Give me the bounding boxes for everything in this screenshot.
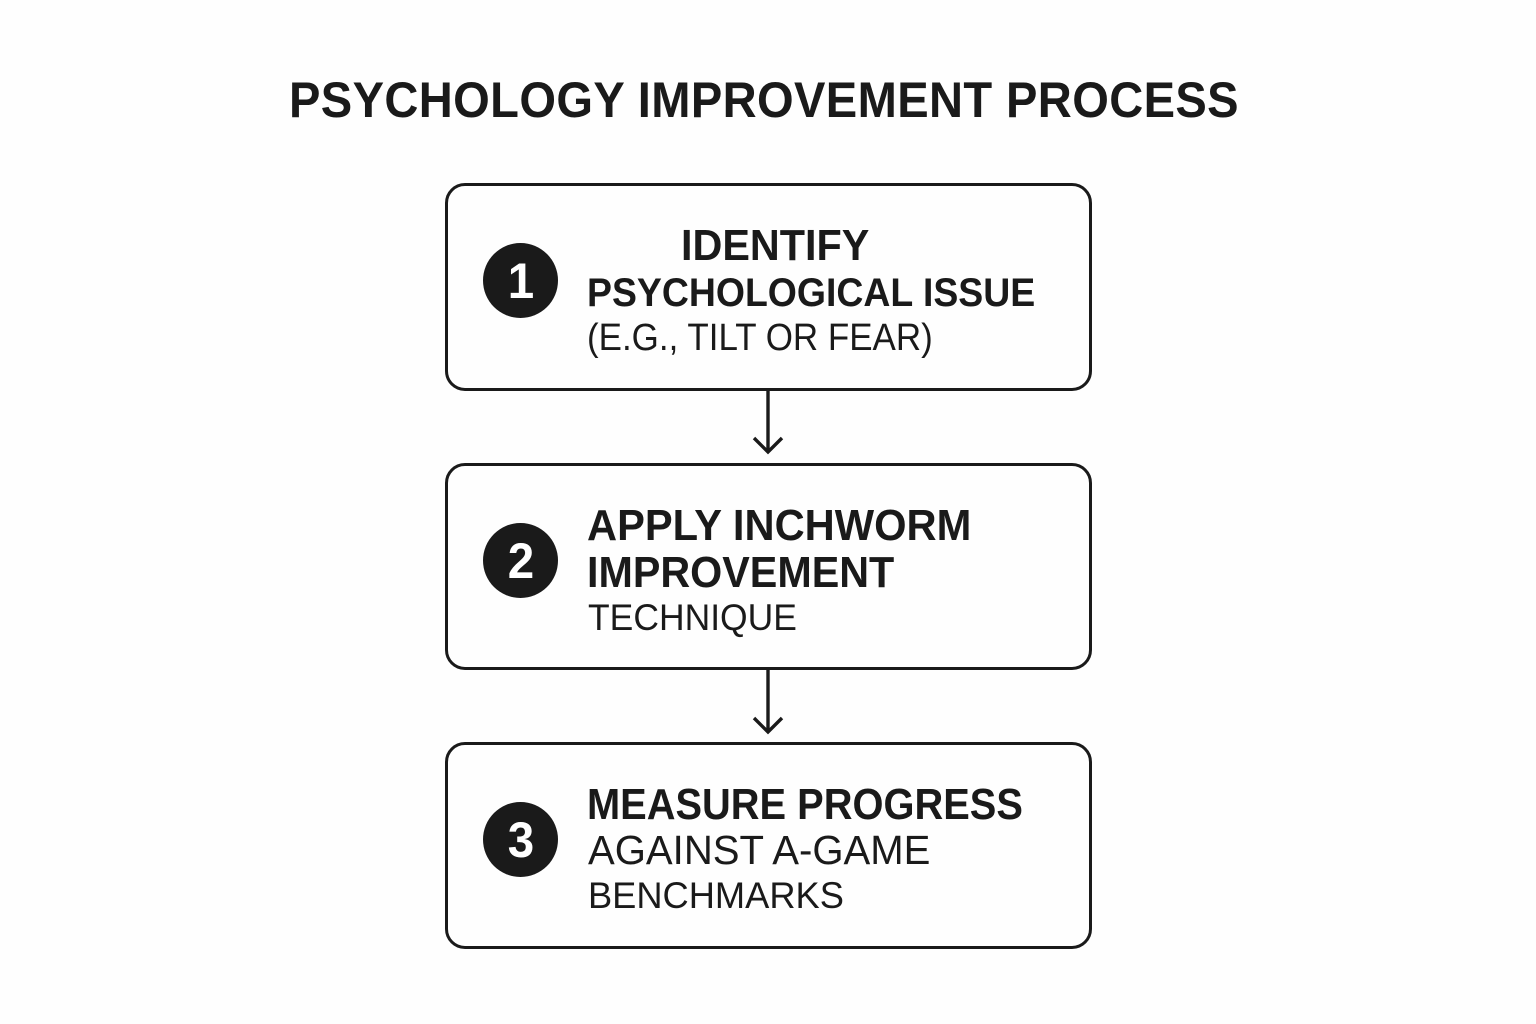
panel: step 3 [445, 742, 1092, 949]
heading: step 1: IDENTIFY [681, 222, 869, 270]
icon: number 2 [483, 523, 558, 598]
title: PSYCHOLOGY IMPROVEMENT PROCESS [289, 72, 1239, 128]
arrow: step 1 to step 2 [752, 391, 784, 454]
heading: step 2 line 1: APPLY INCHWORM [587, 500, 971, 550]
text: step 3 line 2: BENCHMARKS [588, 875, 844, 916]
icon: number 1 [483, 243, 558, 318]
icon: number 3 [483, 802, 558, 877]
text: step 1 detail: (E.G., TILT OR FEAR) [587, 317, 933, 359]
icon: number 1: 1 [507, 253, 534, 309]
text: step 1 subheading: PSYCHOLOGICAL ISSUE [587, 271, 1035, 315]
panel: step 2 [445, 463, 1092, 670]
icon: number 3: 3 [507, 812, 534, 868]
text: step 3 line 1: AGAINST A-GAME [588, 827, 930, 873]
heading: step 3: MEASURE PROGRESS [587, 780, 1023, 828]
heading: step 2 line 2: IMPROVEMENT [587, 548, 894, 597]
panel: step 1 [445, 183, 1092, 391]
text: step 2 detail: TECHNIQUE [588, 596, 797, 638]
icon: number 2: 2 [507, 533, 534, 589]
arrow: step 2 to step 3 [752, 670, 784, 734]
